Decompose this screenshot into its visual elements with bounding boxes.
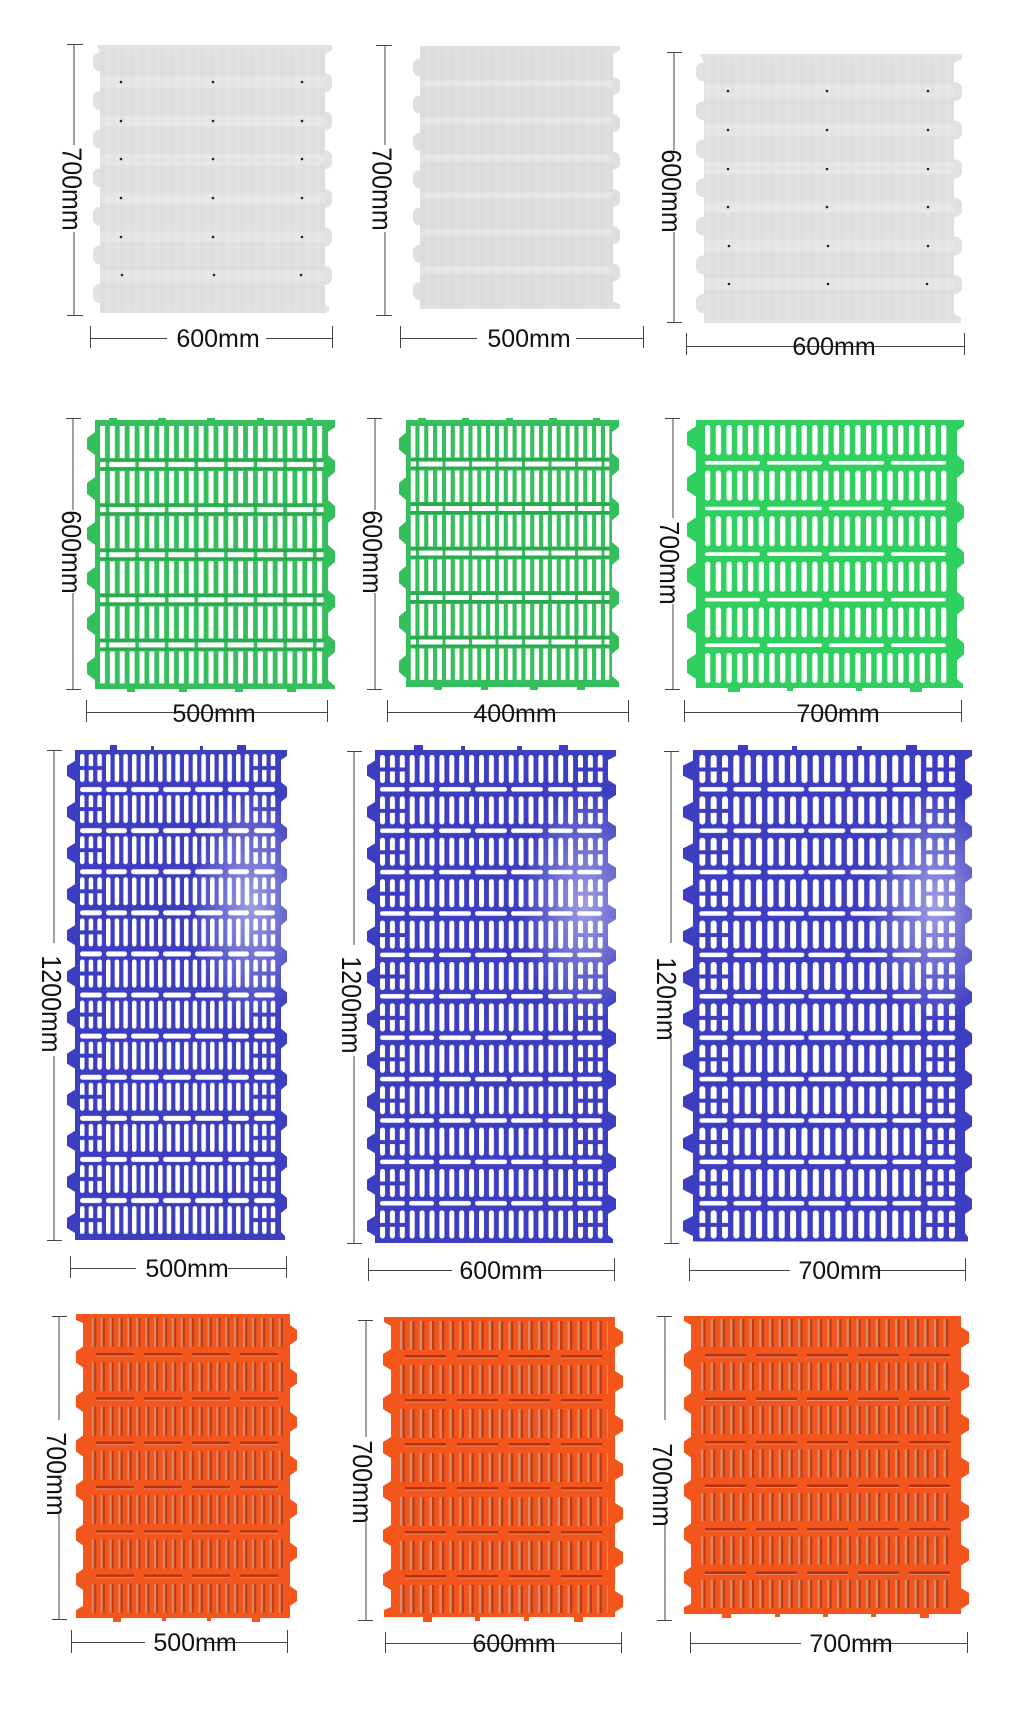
dimension: 1200mm height: 1200mm bbox=[36, 955, 67, 1053]
panel: grey slat 500x700 bbox=[366, 45, 644, 353]
slat: orange 500x700 bbox=[76, 1314, 297, 1622]
slat: orange 600x700 bbox=[383, 1317, 623, 1622]
slat: blue 700x1200 bbox=[683, 745, 1005, 1242]
dimension: 600mm height bbox=[56, 418, 87, 690]
panel: orange slat 700x700 bbox=[647, 1316, 969, 1658]
dimension: 600mm width bbox=[686, 333, 964, 361]
dimension: 700mm height bbox=[56, 44, 88, 316]
dimension: 600mm width bbox=[385, 1630, 622, 1658]
dimension: 500mm width: 500mm bbox=[153, 1629, 237, 1657]
dimension: 500mm width bbox=[71, 1629, 288, 1657]
panel: orange slat 600x700 bbox=[347, 1317, 623, 1658]
dimension: 700mm height bbox=[654, 418, 685, 690]
dimension: 700mm width bbox=[689, 1257, 966, 1285]
dimension: 700mm height: 700mm bbox=[366, 147, 398, 231]
dimension: 600mm width: 600mm bbox=[792, 333, 876, 361]
slat: orange 700x700 bbox=[684, 1316, 969, 1618]
dimension: 600mm height bbox=[357, 418, 388, 690]
dimension: 600mm width: 600mm bbox=[176, 325, 260, 353]
dimension: 500mm width: 500mm bbox=[172, 700, 256, 728]
dimension: 600mm width bbox=[90, 325, 332, 353]
dimension: 700mm width: 700mm bbox=[809, 1630, 893, 1658]
dimension: 600mm width: 600mm bbox=[472, 1630, 556, 1658]
dimension: 600mm height bbox=[656, 52, 687, 322]
dimension: 600mm height: 600mm bbox=[656, 149, 687, 233]
dimension: 500mm width bbox=[70, 1255, 286, 1283]
dimension: 700mm width bbox=[690, 1630, 968, 1658]
dimension: 600mm height: 600mm bbox=[357, 510, 388, 594]
dimension: 700mm height: 700mm bbox=[56, 147, 88, 231]
dimension: 700mm height bbox=[347, 1320, 378, 1620]
panel: green slat 400x600 bbox=[357, 418, 628, 728]
panel: blue slat 500x1200 bbox=[36, 745, 314, 1283]
slat: green 400x600 bbox=[399, 418, 619, 690]
dimension: 700mm height bbox=[366, 45, 398, 316]
slat: grey 500x700 bbox=[413, 46, 620, 309]
dimension: 120mm height bbox=[651, 751, 682, 1244]
panel: blue slat 600x1200 bbox=[336, 745, 650, 1285]
dimension: 1200mm height: 1200mm bbox=[336, 956, 367, 1054]
panel: green slat 700x700 bbox=[654, 418, 964, 728]
dimension: 700mm width: 700mm bbox=[796, 700, 880, 728]
dimension: 700mm height: 700mm bbox=[647, 1443, 678, 1527]
dimension: 500mm width: 500mm bbox=[487, 325, 571, 353]
dimension: 1200mm height bbox=[336, 751, 367, 1244]
panel: grey slat 600x600 bbox=[656, 52, 964, 361]
panel: green slat 500x600 bbox=[56, 418, 335, 728]
dimension: 1200mm height bbox=[36, 750, 67, 1240]
dimension: 700mm height: 700mm bbox=[347, 1440, 378, 1524]
slat: blue 500x1200 bbox=[67, 745, 314, 1240]
panel: orange slat 500x700 bbox=[41, 1314, 297, 1657]
dimension: 120mm height: 120mm bbox=[651, 957, 682, 1041]
dimension: 500mm width bbox=[400, 325, 644, 353]
dimension: 500mm width bbox=[86, 700, 328, 728]
dimension: 700mm width bbox=[684, 700, 962, 728]
dimension: 700mm height: 700mm bbox=[654, 521, 685, 605]
slat: blue 600x1200 bbox=[367, 745, 650, 1243]
dimension: 600mm height: 600mm bbox=[56, 510, 87, 594]
slat: grey 600x700 bbox=[93, 45, 332, 313]
slat: grey 600x600 bbox=[696, 54, 962, 323]
dimension: 600mm width: 600mm bbox=[459, 1257, 543, 1285]
dimension: 500mm width: 500mm bbox=[145, 1255, 229, 1283]
dimension: 700mm height bbox=[647, 1316, 678, 1620]
dimension: 400mm width: 400mm bbox=[473, 700, 557, 728]
dimension: 700mm height bbox=[41, 1316, 72, 1620]
panel: grey slat 600x700 bbox=[56, 44, 333, 353]
dimension: 400mm width bbox=[387, 700, 628, 728]
dimension: 700mm height: 700mm bbox=[41, 1432, 72, 1516]
dimension: 700mm width: 700mm bbox=[798, 1257, 882, 1285]
slat: green 700x700 bbox=[687, 420, 964, 692]
panel: blue slat 700x1200 bbox=[651, 745, 1005, 1285]
slat: green 500x600 bbox=[87, 418, 335, 692]
dimension: 600mm width bbox=[368, 1257, 614, 1285]
